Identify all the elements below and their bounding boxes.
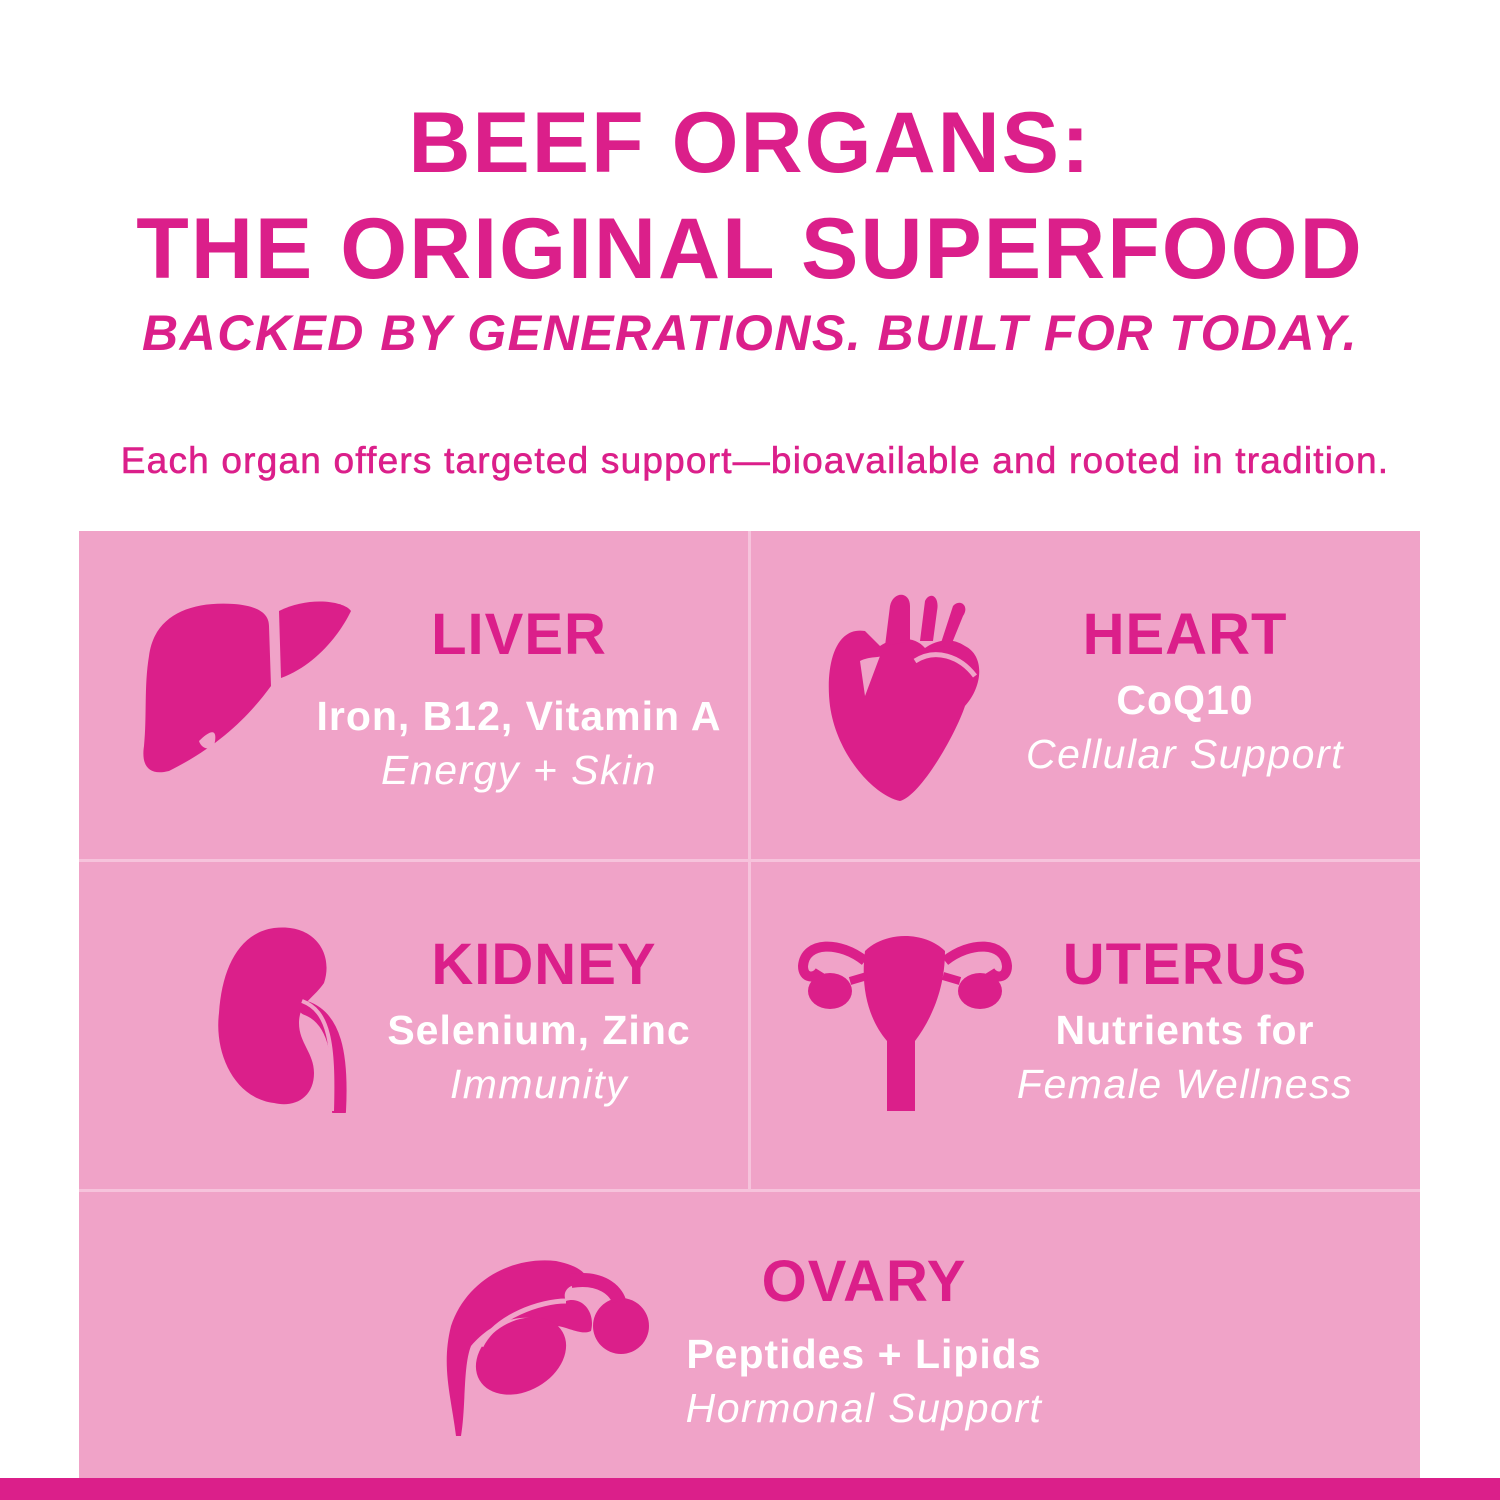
title	[136, 95, 1364, 297]
panel: ovary	[446, 1249, 1042, 1436]
heading: kidney: KIDNEY	[431, 932, 657, 997]
panel: kidney	[218, 928, 691, 1113]
text: kidney	[387, 1007, 691, 1107]
text: liver: Energy + Skin	[381, 747, 657, 793]
text: ovary: Peptides + Lipids	[686, 1331, 1042, 1377]
title: BEEF ORGANS:	[408, 95, 1092, 191]
text: liver: Iron, B12, Vitamin A	[316, 693, 722, 739]
text: ovary	[686, 1331, 1042, 1431]
panel: uterus	[798, 932, 1353, 1111]
text: ovary: Hormonal Support	[686, 1385, 1042, 1431]
heading: ovary: OVARY	[762, 1249, 966, 1314]
subtitle: BACKED BY GENERATIONS. BUILT FOR TODAY.	[142, 305, 1358, 361]
icon: ovary	[446, 1260, 649, 1436]
icon: liver	[143, 602, 351, 772]
icon: heart	[828, 594, 980, 801]
icon: uterus	[798, 936, 1012, 1111]
text: liver	[316, 693, 722, 793]
text: kidney: Selenium, Zinc	[387, 1007, 691, 1053]
text: uterus: Nutrients for	[1056, 1007, 1314, 1053]
title: THE ORIGINAL SUPERFOOD	[136, 201, 1364, 297]
text: heart	[1026, 677, 1344, 777]
heading: uterus: UTERUS	[1063, 932, 1307, 997]
panel: heart	[828, 594, 1344, 801]
text: heart: CoQ10	[1116, 677, 1254, 723]
bottom bar	[0, 1478, 1500, 1500]
panel: liver	[143, 602, 722, 793]
heading: heart: HEART	[1083, 602, 1287, 667]
text: uterus: Female Wellness	[1017, 1061, 1353, 1107]
text: heart: Cellular Support	[1026, 731, 1344, 777]
intro text: Each organ offers targeted support—bioavailable and rooted in tradition.	[121, 440, 1389, 481]
text: uterus	[1017, 1007, 1353, 1107]
icon: kidney	[218, 928, 347, 1113]
text: kidney: Immunity	[450, 1061, 628, 1107]
heading: liver: LIVER	[431, 602, 607, 667]
panel grid	[79, 531, 1420, 1478]
